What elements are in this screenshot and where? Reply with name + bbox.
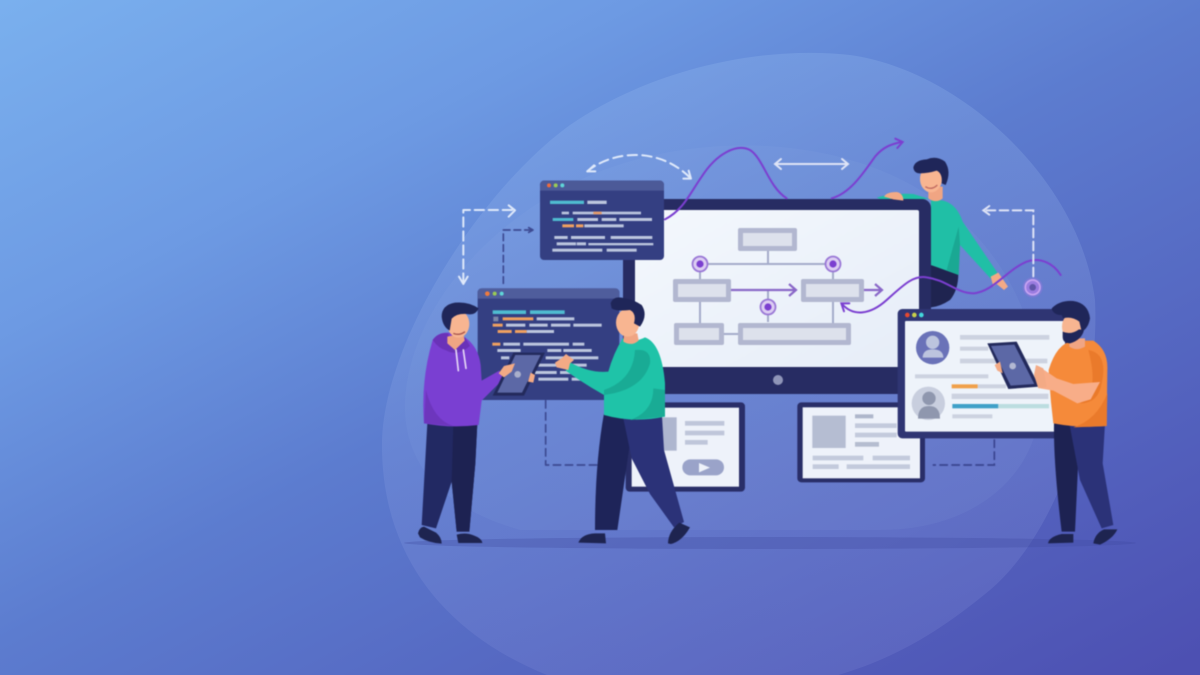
neck bbox=[447, 333, 465, 350]
power dot bbox=[773, 375, 783, 385]
trousers bbox=[422, 423, 477, 532]
thumbnail bbox=[657, 417, 677, 451]
hoodie strings bbox=[456, 350, 466, 371]
front leg bbox=[1069, 423, 1113, 528]
scene artwork bbox=[418, 139, 1117, 545]
white double arrow bbox=[775, 159, 848, 169]
code lines bbox=[492, 310, 602, 381]
dark dashed connector under code window bbox=[546, 401, 600, 465]
profile text lines bbox=[915, 335, 1049, 418]
profile window bbox=[898, 309, 1068, 438]
inner blob bbox=[405, 145, 1040, 530]
monitor bbox=[623, 199, 931, 394]
teal body and arm bbox=[877, 194, 997, 279]
window dots bbox=[547, 183, 564, 187]
beard bbox=[1063, 329, 1084, 343]
flow node right bbox=[826, 256, 840, 272]
shoes bbox=[1048, 529, 1117, 545]
back leg bbox=[595, 413, 633, 530]
purple wave front bbox=[832, 139, 1061, 312]
hair bbox=[442, 302, 479, 331]
hair bbox=[913, 158, 949, 185]
code lines bbox=[550, 201, 653, 252]
blue progress bar bbox=[952, 404, 1049, 408]
code window lower bbox=[478, 288, 619, 400]
neck bbox=[623, 333, 639, 344]
glowing node bbox=[1023, 277, 1043, 297]
shoes bbox=[418, 527, 482, 544]
flow box bottom wide bbox=[738, 323, 851, 345]
person: purple hoodie with tablet bbox=[418, 302, 545, 544]
background blob bbox=[382, 53, 1095, 675]
head bbox=[447, 310, 469, 338]
person: orange shirt with tablet bbox=[987, 301, 1117, 545]
video panel bbox=[626, 402, 745, 492]
image placeholder bbox=[812, 416, 846, 448]
hand down bbox=[991, 273, 1008, 290]
mouth bbox=[925, 185, 937, 188]
person: teal sitting on monitor bbox=[877, 158, 1008, 307]
article panel bbox=[797, 402, 925, 482]
person: teal sweater pointing bbox=[555, 297, 690, 544]
hoodie bbox=[423, 333, 504, 426]
flowchart lines bbox=[700, 251, 833, 334]
dashed arc arrow bbox=[587, 155, 691, 179]
purple wave over monitor corner bbox=[665, 148, 787, 219]
hands bbox=[499, 363, 535, 383]
flow box top bbox=[738, 228, 797, 251]
sweater bbox=[566, 337, 665, 420]
flowchart bbox=[673, 228, 882, 345]
avatar two bbox=[912, 387, 945, 420]
code window upper bbox=[540, 181, 664, 260]
hand bbox=[555, 354, 574, 370]
trousers bbox=[931, 265, 958, 307]
hands bbox=[995, 362, 1047, 388]
flow box middle left bbox=[673, 279, 731, 302]
head bbox=[920, 166, 942, 192]
hand on monitor bbox=[884, 192, 903, 201]
front leg bbox=[623, 416, 684, 527]
dashed connectors right bbox=[933, 206, 1043, 465]
shoes bbox=[578, 523, 690, 544]
flowchart arrows bbox=[731, 284, 882, 296]
text lines bbox=[685, 421, 724, 445]
dark dashed connector bbox=[933, 440, 994, 465]
tablet bbox=[493, 353, 545, 396]
text lines bbox=[813, 414, 910, 469]
neck bbox=[928, 187, 943, 201]
monitor screen bbox=[635, 210, 919, 367]
hair bbox=[1052, 301, 1090, 332]
white dashed elbow arrow bbox=[983, 206, 1033, 278]
mouth bbox=[453, 332, 465, 334]
back leg bbox=[1054, 423, 1080, 532]
window dots bbox=[905, 313, 924, 317]
dark dashed elbow arrow bbox=[503, 228, 533, 283]
window dots bbox=[485, 291, 504, 296]
neck bbox=[1069, 338, 1085, 349]
tablet bbox=[987, 342, 1039, 389]
head bbox=[616, 309, 639, 337]
flow box bottom left bbox=[674, 323, 724, 345]
avatar one bbox=[916, 331, 949, 364]
shirt bbox=[1049, 341, 1107, 427]
hood bbox=[433, 333, 470, 353]
flow node left bbox=[692, 256, 708, 272]
flow box middle right bbox=[801, 279, 864, 302]
flow node centre bbox=[760, 300, 776, 314]
monitor frame bbox=[623, 199, 931, 394]
dashed elbow double arrow bbox=[459, 205, 515, 284]
dashed connectors left bbox=[459, 155, 691, 465]
ground shadow bbox=[404, 537, 1136, 549]
orange progress bar bbox=[952, 384, 978, 388]
play button bbox=[682, 459, 724, 475]
hair bbox=[611, 297, 645, 327]
arm bbox=[1038, 366, 1100, 403]
head bbox=[1062, 313, 1083, 340]
